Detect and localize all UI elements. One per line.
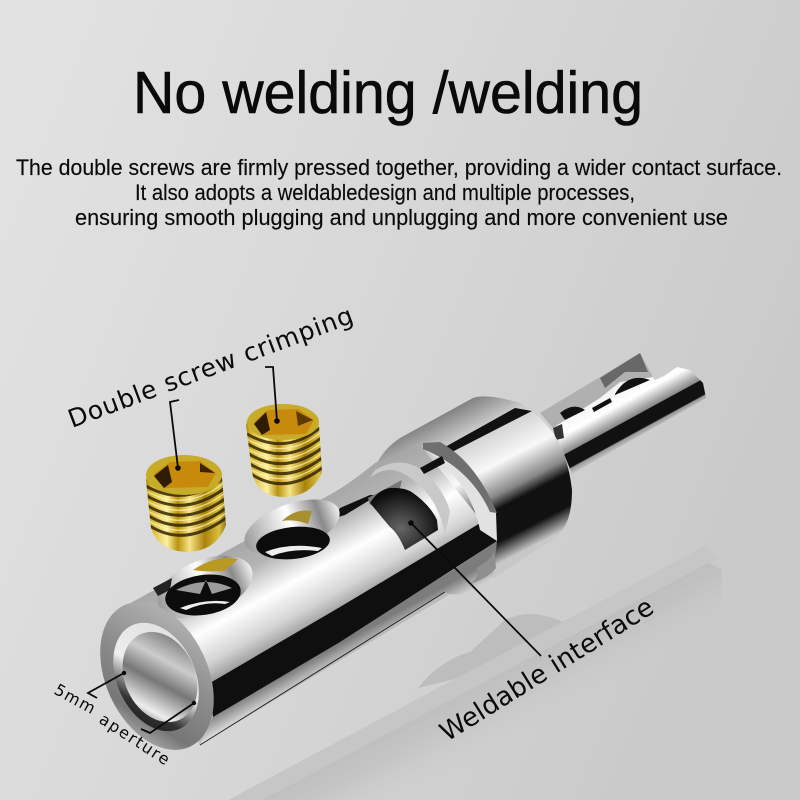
black reflection stripe [210, 513, 497, 717]
title: No welding /welding [133, 60, 643, 126]
lower barrel edge [200, 541, 497, 745]
description text [16, 155, 782, 230]
floor reflection of the connector [228, 546, 722, 800]
dark top groove on collar [445, 408, 532, 452]
connector illustration [78, 353, 706, 768]
label: weldable interface: Weldable interface [435, 592, 659, 748]
front screw hole [149, 543, 261, 631]
underside ring reflection [470, 550, 496, 584]
upper groove near neck [335, 495, 378, 518]
label: double screw crimping: Double screw crimping [64, 301, 357, 434]
label: 5mm: 5mm [51, 680, 99, 718]
front face ring [78, 584, 236, 768]
label: aperture: aperture [96, 709, 173, 769]
leader lines [88, 367, 541, 733]
dark outline of barrel underside [200, 592, 445, 745]
rear screw hole [237, 488, 347, 566]
main barrel [125, 445, 497, 745]
leader dots [122, 418, 414, 705]
description text: It also adopts a weldabledesign and multiple processes, [135, 180, 635, 205]
bore interior [108, 620, 212, 734]
description text: ensuring smooth plugging and unplugging and more convenient use [75, 205, 728, 230]
right gold screw [246, 404, 322, 497]
rear collar [377, 396, 572, 580]
tail pin with slotted prongs [540, 353, 706, 474]
description text: The double screws are firmly pressed together, providing a wider contact surface. [16, 155, 782, 180]
weldable interface notch [370, 488, 438, 550]
shoulder ring [370, 462, 450, 535]
inner chamfer [97, 609, 215, 745]
left gold screw [146, 455, 226, 552]
